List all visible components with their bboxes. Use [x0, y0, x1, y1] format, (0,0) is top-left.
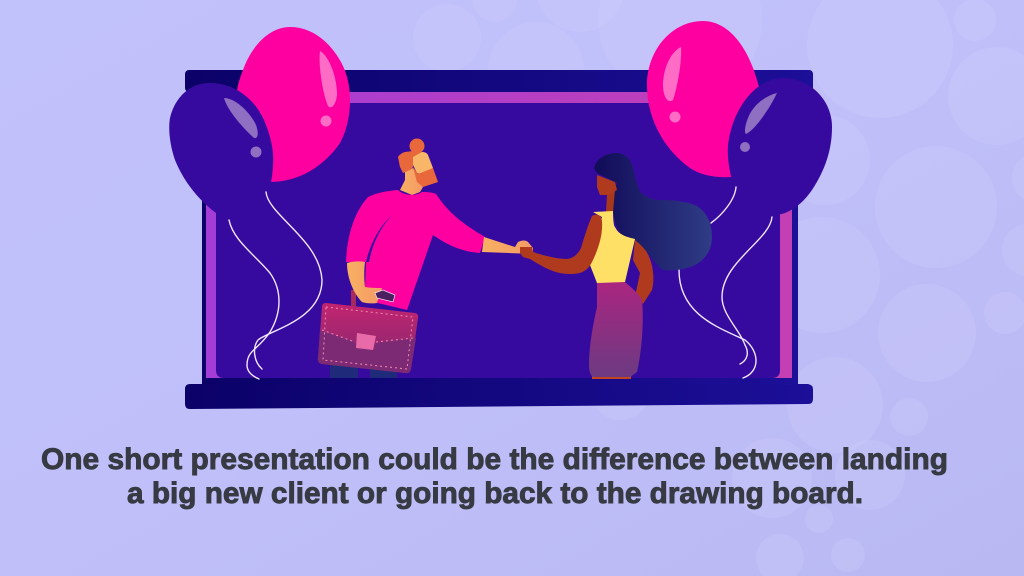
purple balloon left	[169, 83, 273, 221]
bottom bar	[185, 384, 813, 409]
bag handle	[351, 290, 356, 306]
left balloons	[169, 27, 350, 221]
flap shadow	[318, 330, 416, 373]
hair bun	[410, 138, 424, 154]
purple balloon right	[728, 78, 832, 215]
hair	[398, 151, 422, 173]
background bubbles	[413, 0, 1024, 576]
balloon strings	[229, 187, 772, 379]
face	[413, 152, 433, 175]
man forearm holding bag	[347, 261, 382, 303]
stitching	[322, 307, 413, 369]
skirt	[589, 282, 643, 377]
long hair	[594, 153, 712, 270]
face	[597, 175, 617, 195]
caption line 2: a big new client or going back to the drawing board.	[127, 477, 863, 510]
feet	[592, 374, 631, 379]
yellow top	[590, 211, 635, 284]
trousers	[330, 365, 397, 378]
pink balloon right highlight	[663, 47, 681, 101]
man forearm shaking	[482, 237, 533, 254]
woman arm	[520, 215, 602, 274]
neck	[606, 190, 615, 212]
pink balloon left highlight	[320, 51, 337, 107]
caption	[41, 443, 948, 510]
woman figure	[520, 153, 712, 379]
window interior	[216, 103, 780, 378]
man figure	[318, 138, 533, 378]
purple balloon right highlight	[745, 93, 777, 134]
purple balloon left highlight	[224, 98, 258, 138]
pink balloon right	[647, 21, 760, 177]
frame side posts	[202, 90, 798, 386]
right balloons	[647, 21, 832, 215]
window frame	[185, 70, 813, 409]
woman far arm	[633, 240, 653, 304]
beard	[413, 167, 438, 187]
top bar	[185, 70, 813, 92]
arm crease	[366, 215, 392, 262]
clasp	[356, 333, 376, 350]
phone	[375, 290, 395, 302]
lilac inner wall	[206, 92, 792, 380]
neck	[400, 168, 423, 195]
briefcase	[318, 303, 418, 373]
caption line 1: One short presentation could be the difference between landing	[41, 443, 948, 476]
case body	[318, 303, 418, 373]
pink balloon left	[236, 27, 350, 182]
pink shirt	[346, 190, 485, 310]
